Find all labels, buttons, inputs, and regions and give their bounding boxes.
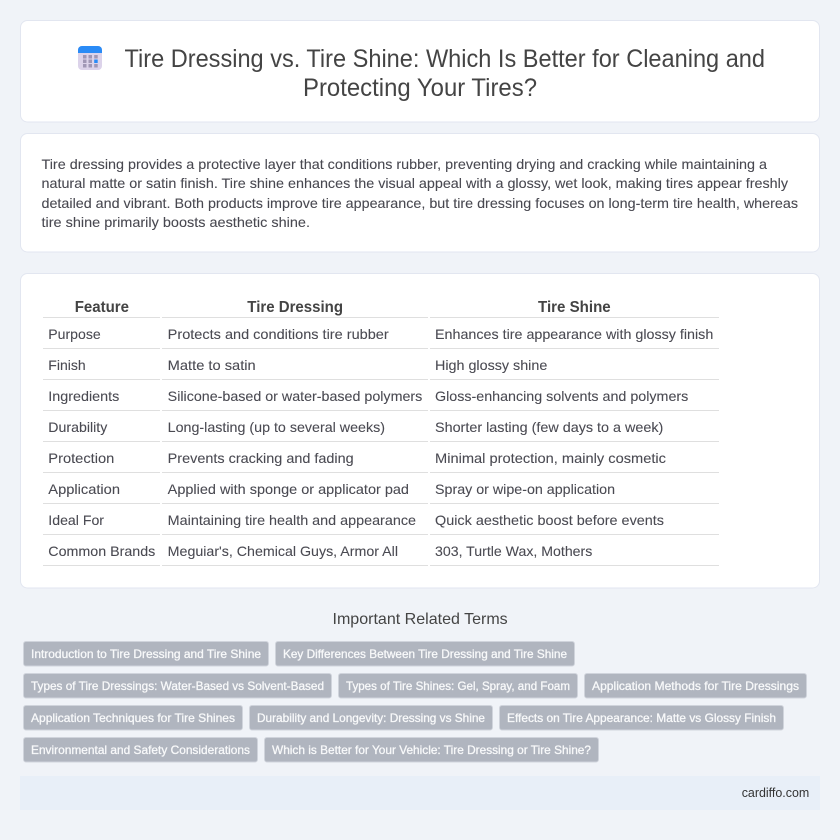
text block: summary paragraph: tire shine primarily boosts aesthetic shine. bbox=[42, 214, 310, 230]
chip: types of dressings: Types of Tire Dressings: Water-Based vs Solvent-Based bbox=[31, 679, 324, 693]
footer bbox=[20, 776, 820, 810]
row: ingredients: Gloss-enhancing solvents and polymers bbox=[435, 388, 688, 404]
chip: types of dressings bbox=[24, 674, 332, 698]
chip: key differences bbox=[276, 642, 574, 666]
row: common brands: Meguiar's, Chemical Guys, Armor All bbox=[168, 543, 398, 559]
footer: cardiffo.com bbox=[742, 785, 809, 800]
chip: types of shines: Types of Tire Shines: Gel, Spray, and Foam bbox=[346, 679, 570, 693]
row: protection: Protection bbox=[48, 450, 114, 466]
row: ideal for: Quick aesthetic boost before events bbox=[435, 512, 664, 528]
row: purpose bbox=[43, 326, 719, 349]
chip: application methods: Application Methods for Tire Dressings bbox=[592, 679, 799, 693]
related term chips bbox=[24, 642, 806, 762]
row: purpose: Protects and conditions tire rubber bbox=[168, 326, 389, 342]
chip: application techniques: Application Techniques for Tire Shines bbox=[31, 711, 235, 725]
row: ingredients bbox=[43, 388, 719, 411]
chip: types of shines bbox=[338, 674, 578, 698]
text block: summary paragraph: natural matte or satin finish. Tire shine enhances the visual appeal with a glossy, wet look, making tires appear freshly bbox=[42, 175, 788, 191]
row: durability: Long-lasting (up to several weeks) bbox=[168, 419, 385, 435]
table header bbox=[43, 299, 719, 318]
table header: Tire Dressing bbox=[247, 299, 343, 316]
table header: Tire Shine bbox=[538, 299, 611, 316]
text block: summary paragraph: detailed and vibrant. Both products improve tire appearance, but tire dressing focuses on long-term tire health, whereas bbox=[42, 195, 798, 211]
row: protection: Minimal protection, mainly cosmetic bbox=[435, 450, 666, 466]
row: ideal for bbox=[43, 512, 719, 535]
chip: effects on appearance bbox=[500, 706, 784, 730]
icon: calendar bbox=[78, 46, 102, 70]
row: purpose: Enhances tire appearance with glossy finish bbox=[435, 326, 713, 342]
chip: which is better bbox=[264, 738, 598, 762]
row: finish: Finish bbox=[48, 357, 86, 373]
text block: summary paragraph: Tire dressing provides a protective layer that conditions rubber, preventing drying and cracking while maintaining a bbox=[42, 156, 767, 172]
heading: important related terms: Important Related Terms bbox=[332, 611, 508, 628]
text block: summary paragraph bbox=[42, 156, 798, 230]
row: finish: High glossy shine bbox=[435, 357, 548, 373]
chip: environmental: Environmental and Safety Considerations bbox=[31, 743, 250, 757]
row: finish bbox=[43, 357, 719, 380]
chip: which is better: Which is Better for Your Vehicle: Tire Dressing or Tire Shine? bbox=[272, 743, 591, 757]
chip: durability: Durability and Longevity: Dressing vs Shine bbox=[257, 711, 485, 725]
chip: introduction bbox=[24, 642, 268, 666]
row: ingredients: Silicone-based or water-based polymers bbox=[168, 388, 422, 404]
chip: key differences: Key Differences Between Tire Dressing and Tire Shine bbox=[283, 647, 567, 661]
title: Protecting Your Tires? bbox=[303, 74, 537, 102]
row: application: Application bbox=[48, 481, 120, 497]
row: protection bbox=[43, 450, 719, 473]
panel: comparison table bbox=[20, 274, 820, 588]
panel: introduction bbox=[20, 134, 820, 252]
row: durability: Durability bbox=[48, 419, 107, 435]
chip: environmental bbox=[24, 738, 258, 762]
title bbox=[124, 45, 765, 102]
chip: durability bbox=[250, 706, 492, 730]
title: Tire Dressing vs. Tire Shine: Which Is Better for Cleaning and bbox=[124, 45, 765, 73]
table header: Feature bbox=[75, 299, 129, 316]
row: application: Applied with sponge or applicator pad bbox=[168, 481, 409, 497]
chip: effects on appearance: Effects on Tire Appearance: Matte vs Glossy Finish bbox=[507, 711, 776, 725]
row: ingredients: Ingredients bbox=[48, 388, 119, 404]
row: ideal for: Ideal For bbox=[48, 512, 104, 528]
row: common brands bbox=[43, 543, 719, 566]
row: protection: Prevents cracking and fading bbox=[168, 450, 354, 466]
row: durability bbox=[43, 419, 719, 442]
row: finish: Matte to satin bbox=[168, 357, 256, 373]
panel: header bbox=[20, 20, 820, 122]
chip: application methods bbox=[584, 674, 806, 698]
row: common brands: Common Brands bbox=[48, 543, 155, 559]
row: ideal for: Maintaining tire health and appearance bbox=[168, 512, 416, 528]
row: application: Spray or wipe-on application bbox=[435, 481, 615, 497]
chip: application techniques bbox=[24, 706, 242, 730]
row: durability: Shorter lasting (few days to a week) bbox=[435, 419, 663, 435]
row: purpose: Purpose bbox=[48, 326, 101, 342]
chip: introduction: Introduction to Tire Dressing and Tire Shine bbox=[31, 647, 261, 661]
row: common brands: 303, Turtle Wax, Mothers bbox=[435, 543, 592, 559]
row: application bbox=[43, 481, 719, 504]
